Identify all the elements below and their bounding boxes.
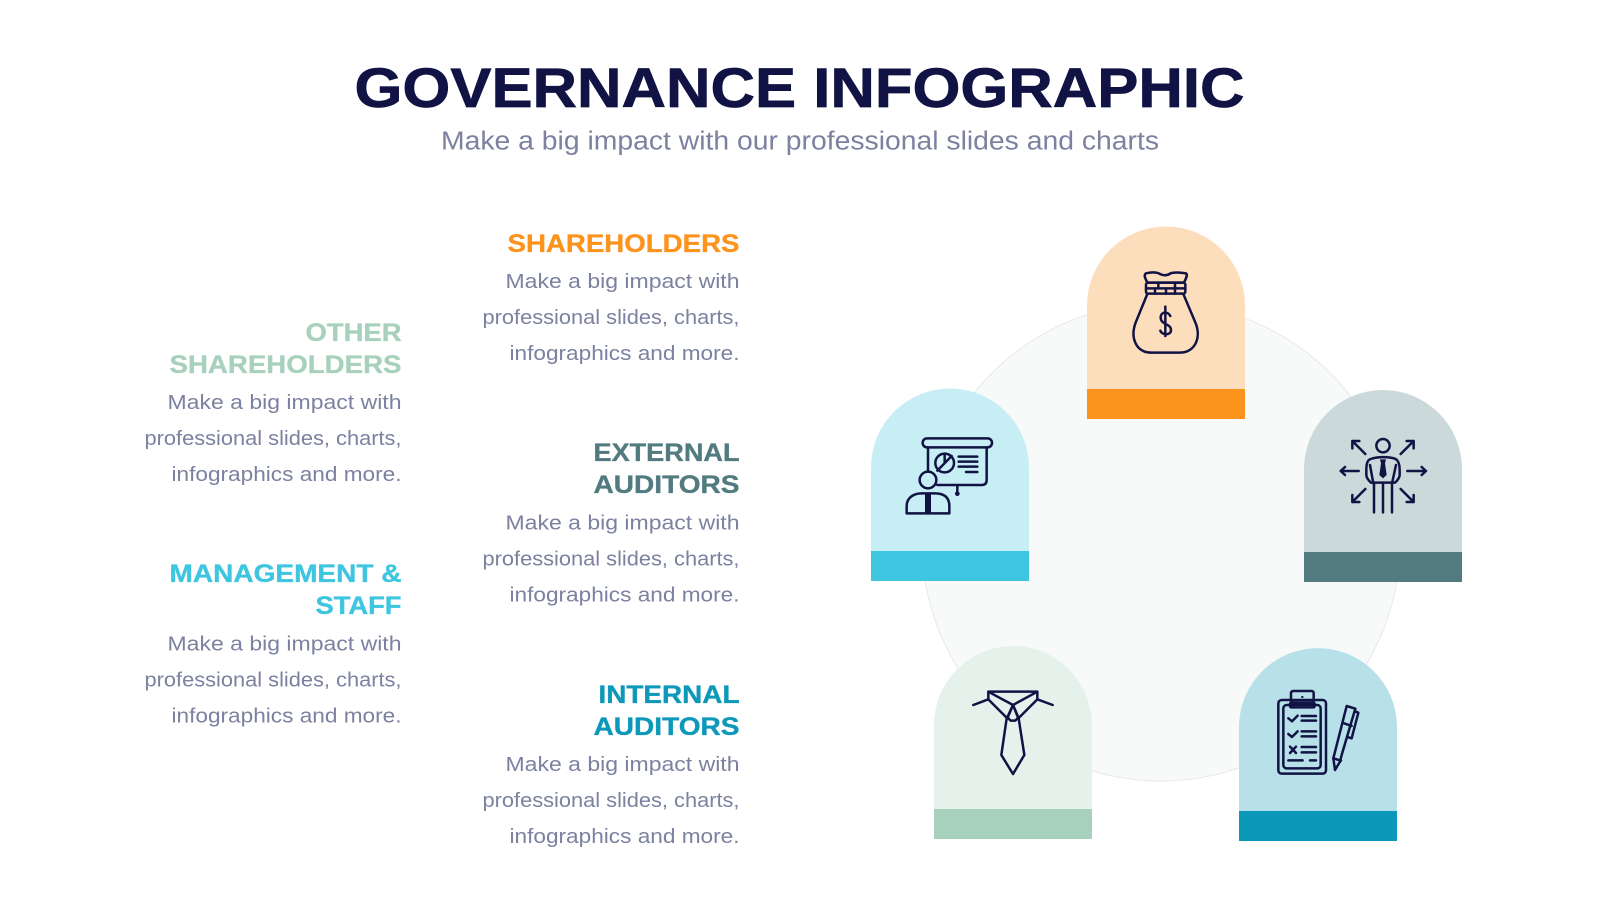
text block: other shareholders: SHAREHOLDERS bbox=[170, 351, 402, 379]
icon: presenter with board bbox=[907, 438, 992, 513]
text block: shareholders: infographics and more. bbox=[510, 342, 740, 365]
text block: shareholders bbox=[482, 230, 740, 365]
text block: management and staff: infographics and more. bbox=[172, 704, 402, 728]
text block: shareholders: Make a big impact with bbox=[506, 270, 740, 293]
text block: internal auditors bbox=[482, 681, 740, 848]
icon: clipboard and pen bbox=[1278, 691, 1358, 774]
text block: external auditors: Make a big impact with bbox=[506, 512, 740, 534]
text block: other shareholders: professional slides, charts, bbox=[144, 427, 402, 450]
card: shareholders bbox=[1087, 227, 1245, 419]
text block: shareholders: SHAREHOLDERS bbox=[508, 230, 740, 258]
icon: money bag bbox=[1134, 272, 1198, 353]
subtitle: Make a big impact with our professional slides and charts bbox=[441, 128, 1159, 156]
text block: management and staff: STAFF bbox=[316, 592, 402, 620]
icon: necktie bbox=[973, 692, 1053, 774]
background circle bbox=[922, 303, 1400, 781]
text block: shareholders: professional slides, charts, bbox=[482, 306, 740, 329]
text block: internal auditors: professional slides, charts, bbox=[482, 789, 740, 812]
text block: internal auditors: infographics and more. bbox=[510, 825, 740, 848]
text block: management and staff: MANAGEMENT & bbox=[170, 560, 402, 588]
text block: external auditors bbox=[482, 439, 740, 606]
card: management and staff bbox=[871, 389, 1029, 581]
text block: management and staff: professional slides, charts, bbox=[144, 668, 402, 692]
text block: external auditors: AUDITORS bbox=[594, 471, 740, 499]
card: internal auditors bbox=[1239, 648, 1397, 841]
text block: external auditors: professional slides, charts, bbox=[482, 548, 740, 570]
title: GOVERNANCE INFOGRAPHIC bbox=[354, 56, 1244, 119]
text block: management and staff bbox=[144, 560, 402, 728]
text block: internal auditors: INTERNAL bbox=[598, 681, 740, 709]
text block: external auditors: infographics and more. bbox=[510, 584, 740, 606]
text block: other shareholders: infographics and more. bbox=[172, 463, 402, 486]
card: external auditors bbox=[1304, 390, 1462, 582]
text block: internal auditors: Make a big impact with bbox=[506, 753, 740, 776]
text block: other shareholders: OTHER bbox=[306, 319, 402, 347]
text block: other shareholders: Make a big impact with bbox=[168, 391, 402, 414]
text block: management and staff: Make a big impact with bbox=[168, 632, 402, 656]
text block: other shareholders bbox=[144, 319, 402, 486]
icon: person with arrows bbox=[1341, 439, 1426, 512]
text block: internal auditors: AUDITORS bbox=[594, 713, 740, 741]
card: other shareholders bbox=[934, 646, 1092, 839]
text block: external auditors: EXTERNAL bbox=[594, 439, 740, 467]
